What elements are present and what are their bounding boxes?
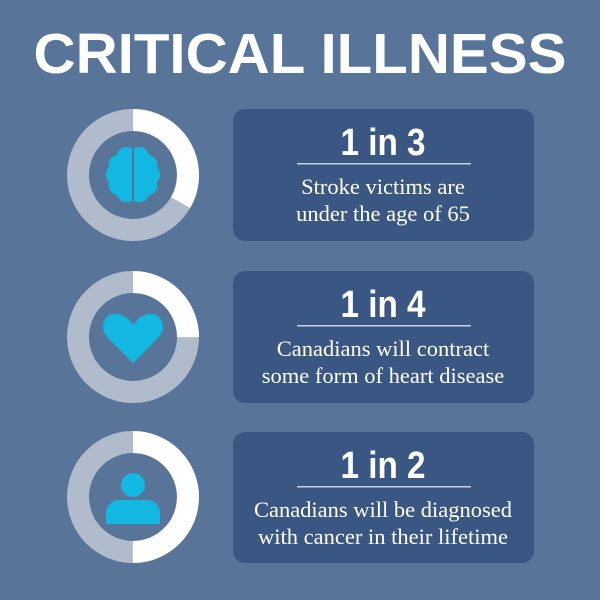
panel: stroke: 1 in 3 — [340, 122, 426, 164]
panel: stroke — [233, 109, 534, 241]
panel: stroke: under the age of 65 — [296, 201, 470, 226]
panel: cancer — [233, 432, 534, 563]
panel: cancer: with cancer in their lifetime — [258, 524, 508, 549]
panel: heart disease: Canadians will contract — [277, 336, 490, 361]
icon: brain — [106, 147, 160, 202]
title: CRITICAL ILLNESS — [34, 22, 566, 86]
donut: heart 1 in 4 — [78, 282, 188, 392]
panel: heart disease: 1 in 4 — [340, 284, 426, 326]
icon: person — [106, 473, 160, 524]
panel: cancer: Canadians will be diagnosed — [254, 497, 512, 522]
panel: cancer: 1 in 2 — [340, 445, 426, 487]
panel: heart disease — [233, 271, 534, 403]
panel: heart disease: some form of heart disease — [262, 363, 504, 388]
icon: heart — [103, 314, 163, 363]
donut: cancer 1 in 2 — [78, 442, 188, 552]
donut: stroke 1 in 3 — [78, 120, 188, 230]
panel: stroke: Stroke victims are — [301, 174, 465, 199]
